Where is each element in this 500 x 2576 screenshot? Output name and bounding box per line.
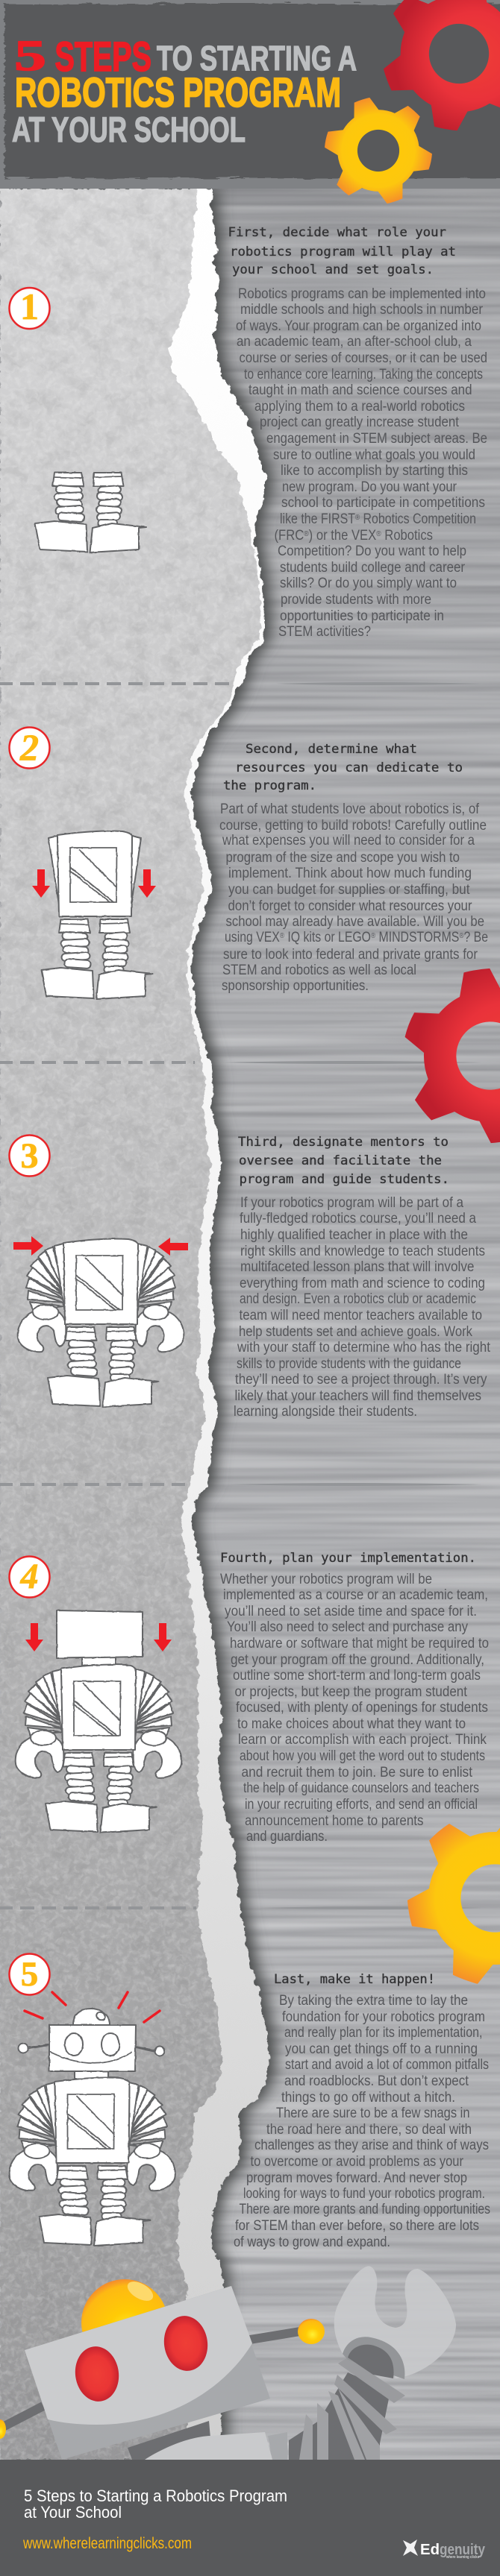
step 1 body text: Robotics [381,528,433,544]
title: AT YOUR SCHOOL [12,110,246,149]
panel: footer [0,2460,500,2576]
step 1 body text: ® [355,514,360,522]
step 2 heading: resources you can dedicate to [235,760,463,775]
step 4 heading: Fourth, plan your implementation. [220,1551,476,1566]
step 2 robot: torso and legs [42,831,152,999]
antenna dome [81,2278,168,2366]
step 5 body text: things to go off without a hitch. [281,2090,455,2106]
step 2 body text: STEM and robotics as well as local [222,963,416,978]
step 4 body text [220,1572,489,1845]
arrow: step 3 left, pointing right [13,1236,43,1256]
step 5 number badge [9,1953,49,1995]
step 4 body text: and recruit them to join. Be sure to enlist [242,1765,473,1780]
step 5 body text: There are sure to be a few snags in [276,2106,470,2121]
step 1 body text [236,286,487,640]
step 3 heading: oversee and facilitate the [239,1153,442,1168]
step 5 body text: to overcome or avoid problems as your [251,2154,464,2170]
step 5 robot: complete with head [9,2009,175,2246]
step 2 body text: what expenses you will need to consider for a [222,833,475,848]
step 3 heading: Third, designate mentors to [238,1135,449,1150]
panel: paper texture [0,189,276,2460]
arrow: step 2 left, pointing down [32,869,50,898]
step 1 body text: STEM activities? [278,624,371,640]
title: 5 [14,31,46,80]
step 3 body text [234,1195,491,1420]
step 3 body text: multifaceted lesson plans that will involve [240,1259,475,1275]
step 1 body text: ) or the VEX [309,528,377,544]
step 2 heading [223,742,463,793]
step 4 robot: head, torso, arms and legs [16,1610,181,1833]
robot antenna right [250,2319,325,2344]
title [12,31,357,149]
step 5 body text: and roadblocks. But don’t expect [284,2073,469,2089]
step 3 number badge [9,1135,49,1177]
panel: header [0,0,500,189]
step 4 number badge: 4 [19,1557,39,1596]
step 3 body text: skills to provide students with the guidance [237,1356,461,1372]
step 4 body text: and guardians. [246,1829,328,1845]
step 2 body text: implement. Think about how much funding [228,866,472,881]
step 1 body text: Robotics Competition [360,511,476,527]
title: TO STARTING A [157,39,357,78]
logo: Edgenuity: Ed [420,2542,440,2558]
robot antenna left [0,2406,43,2439]
step 1 body text: ® [304,530,309,538]
step 3 heading [238,1135,449,1187]
step 3 heading: program and guide students. [239,1172,449,1187]
arrow: step 4 left, pointing down [25,1623,43,1651]
step 1 body text: applying them to a real-world robotics [254,399,465,415]
step 3 body text: fully-fledged robotics course, you’ll need a [240,1211,476,1226]
step 1 body text: school to participate in competitions [281,495,485,511]
torn paper edge [0,189,276,2460]
step 5 number badge: 5 [21,1955,38,1994]
step 1 robot: feet and legs [35,473,146,552]
step 5 body text [234,1993,490,2250]
logo: Edgenuity: genuity [440,2542,486,2558]
step 3 body text: If your robotics program will be part of a [240,1195,463,1211]
title: ROBOTICS PROGRAM [15,69,341,116]
step 1 body text: an academic team, an after-school club, a [237,334,472,350]
step 5 body text: program moves forward. And never stop [246,2170,467,2186]
icon: yellow gear, header [316,90,441,211]
step 2 body text: MINDSTORMS [375,930,459,945]
icon: yellow gear, lower [376,1779,500,2018]
step 1 body text: skills? Or do you simply want to [280,576,457,591]
step 5 body text: By taking the extra time to lay the [279,1993,468,2009]
step 4 body text: or projects, but keep the program student [234,1684,468,1700]
step 1 body text: sure to outline what goals you would [273,447,475,463]
step 3 robot: torso, arms and legs [18,1239,184,1407]
step 2 number badge [9,726,49,768]
arrow: step 2 right, pointing down [138,869,156,898]
step 1 body text: (FRC [275,528,308,544]
icon: red gear, header [354,0,500,158]
step 4 body text: to make choices about what they want to [237,1716,466,1732]
step 4 number badge [9,1557,49,1597]
arrow: step 3 right, pointing left [158,1238,188,1256]
logo: Edgenuity: where learning clicks [446,2555,479,2560]
step 2 body text: ® [371,932,376,940]
step 5 body text: the road here and there, so deal with [266,2122,472,2138]
step 2 body text: program of the size and scope you wish to [225,850,460,866]
step 3 body text: highly qualified teacher in place with the [240,1227,468,1243]
logo: Edgenuity [403,2539,486,2560]
footer title [24,2487,287,2522]
robot wrench hand [334,2266,456,2379]
step 1 body text: project can greatly increase student [260,415,460,430]
step 1 body text: ® [376,530,381,538]
step 3 body text: learning alongside their students. [234,1404,417,1420]
robot arm bellows [268,2358,405,2460]
step 2 body text: ? Be [463,930,488,945]
footer title: 5 Steps to Starting a Robotics Program [24,2487,287,2505]
step 2 body text: ® [459,932,464,940]
robot neck and body [128,2421,272,2460]
step 2 number badge: 2 [19,726,39,768]
step 1 body text: Competition? Do you want to help [278,544,466,559]
step 5 heading: Last, make it happen! [274,1972,435,1987]
step 1 body text: opportunities to participate in [280,608,444,624]
section dividers [0,682,481,1909]
footer title: at Your School [24,2503,122,2522]
step 4 body text: You’ll also need to select and purchase any [227,1619,468,1635]
step 1 body text: new program. Do you want your [282,479,457,495]
step 2 body text [219,802,488,994]
step 1 heading [228,225,456,277]
arrow: step 4 right, pointing down [154,1623,172,1651]
title: STEPS [55,33,151,80]
step 1 body text: provide students with more [281,592,431,608]
step 2 body text: IQ kits or LEGO [284,930,371,945]
step 4 body text: Whether your robotics program will be [220,1572,432,1587]
step 2 heading: the program. [223,778,316,793]
step 2 heading: Second, determine what [246,742,417,757]
step 1 body text: taught in math and science courses and [249,382,472,398]
step 4 body text: you’ll need to set aside time and space for it. [225,1604,477,1619]
big robot illustration [0,2266,456,2460]
step 1 body text: like to accomplish by starting this [281,463,468,479]
step 2 body text: ® [280,932,285,940]
step 2 body text: sure to look into federal and private grants for [223,947,478,963]
icon: red gear, middle [380,948,500,1163]
step 4 body text: announcement home to parents [245,1813,424,1829]
step 1 body text: students build college and career [280,560,466,576]
step 1 body text: like the FIRST [280,511,369,527]
icon: red excitement ticks [25,1992,160,2022]
robot head [25,2286,270,2460]
step 1 heading: your school and set goals. [232,262,434,277]
step 1 heading: robotics program will play at [230,245,456,259]
step 5 body text: of ways to grow and expand. [234,2235,390,2250]
footer url: www.wherelearningclicks.com [22,2535,192,2552]
step 3 body text: help students set and achieve goals. Work [239,1324,472,1340]
step 1 number badge [9,286,49,329]
step 2 body text: sponsorship opportunities. [222,978,369,994]
step 5 body text: you can get things off to a running [285,2041,478,2057]
step 2 body text: using VEX [225,930,291,945]
step 1 number badge: 1 [20,286,39,327]
step 1 heading: First, decide what role your [228,225,446,240]
step 2 body text: don’t forget to consider what resources your [228,898,472,914]
step 2 body text: you can budget for supplies or staffing, but [228,882,470,898]
step 3 number badge: 3 [21,1136,39,1176]
